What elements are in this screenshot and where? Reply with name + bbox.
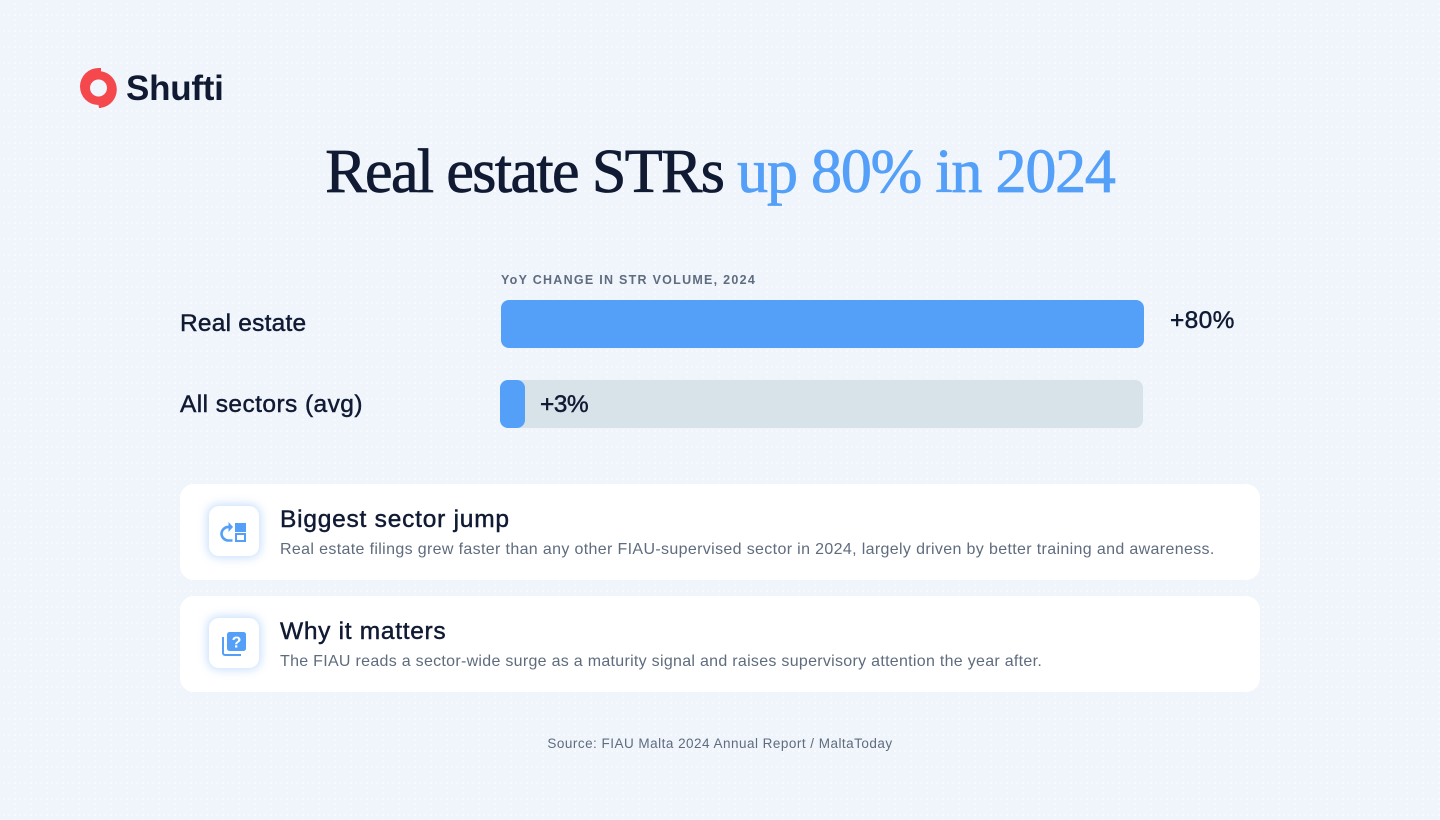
panel: why it matters — [180, 596, 1260, 692]
label: real estate: Real estate — [180, 310, 306, 337]
label: all sectors: All sectors (avg) — [180, 391, 363, 418]
logo wordmark: Shufti — [126, 69, 224, 108]
icon: question cards — [209, 618, 259, 668]
chart axis caption: YoY CHANGE IN STR VOLUME, 2024 — [501, 273, 756, 287]
card text: Real estate filings grew faster than any other FIAU-supervised sector in 2024, largely driven by better training and awareness. — [280, 541, 1215, 558]
card text: The FIAU reads a sector-wide surge as a maturity signal and raises supervisory attention the year after. — [280, 653, 1042, 670]
icon: logo ring — [80, 68, 117, 108]
bar track: all sectors — [501, 380, 1143, 428]
value: +3%: +3% — [540, 391, 588, 418]
icon: question cards: ? — [232, 634, 241, 652]
card heading: Why it matters — [280, 618, 446, 645]
bar: real estate — [501, 300, 1144, 348]
card heading: Biggest sector jump — [280, 506, 510, 533]
bar: all sectors — [500, 380, 525, 428]
logo: Shufti — [80, 68, 224, 108]
value: +80%: +80% — [1170, 307, 1235, 334]
source note: Source: FIAU Malta 2024 Annual Report / MaltaToday — [547, 736, 893, 751]
panel: biggest sector jump — [180, 484, 1260, 580]
icon: arrow and blocks — [209, 506, 259, 556]
title: Real estate STRs up 80% in 2024 — [325, 138, 1115, 206]
bar chart — [180, 300, 1235, 428]
